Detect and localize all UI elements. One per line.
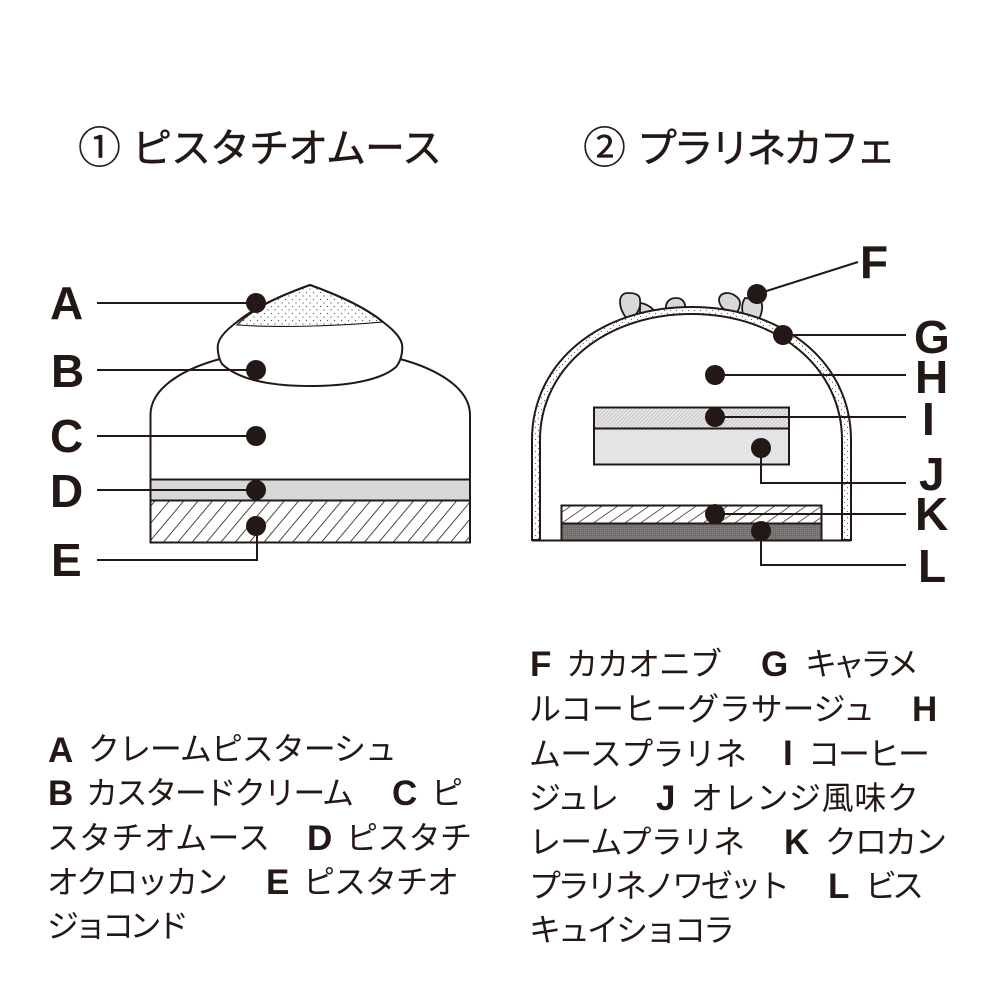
legend: praline cafe components: カカオニブ [566,646,722,682]
letter labels F to L: H [915,351,948,403]
letter labels F to L: L [918,540,946,592]
legend: pistachio mousse components: オクロッカン [47,864,228,900]
legend: pistachio mousse components: E [266,863,289,902]
letter labels A to E: A [50,277,83,329]
letter labels F to L: F [860,236,888,288]
letter labels A to E [50,277,84,586]
base line [532,540,851,542]
legend: praline cafe components: オレンジ風味ク [691,780,919,816]
cream blob B [218,285,402,386]
legend: praline cafe components: H [912,690,937,729]
heading: praline cafe: ② [583,125,626,173]
letter labels A to E: E [51,534,82,586]
leader lines A to E [97,303,257,560]
legend: praline cafe components: レームプラリネ [529,824,745,860]
legend: pistachio mousse components: A [48,731,73,770]
legend: pistachio mousse components: カスタードクリーム [86,775,354,811]
heading: pistachio mousse: ピスタチオムース [132,127,442,171]
legend: praline cafe components: K [784,823,809,862]
legend: pistachio mousse components: D [307,819,332,858]
legend: praline cafe components [529,645,947,948]
letter labels A to E: D [50,465,83,517]
letter labels A to E: B [51,345,84,397]
legend: praline cafe components: ジュレ [529,780,619,816]
legend: praline cafe components: ビス [865,868,924,904]
icon: cacao nibs [620,293,762,321]
legend: praline cafe components: クロカン [825,824,947,860]
legend: praline cafe components: F [530,645,551,684]
legend: pistachio mousse components: C [392,774,417,813]
letter labels F to L: I [922,393,935,445]
marker dots A to E [246,293,266,536]
legend: pistachio mousse components: ピスタチオ [303,864,459,900]
leader lines F to L [715,262,906,565]
insert I: coffee gelee [594,408,789,428]
legend: pistachio mousse components: ジョコンド [47,908,189,944]
legend: praline cafe components: プラリネノワゼット [529,868,790,904]
heading: praline cafe: プラリネカフェ [637,127,896,171]
coating G: dome shell [532,307,851,540]
layer E: pistachio joconde [150,500,470,542]
insert J: orange praline cream [594,428,789,464]
layer L: biscuit chocolat [562,524,822,540]
diagram: praline cafe cross-section [532,236,950,592]
legend: pistachio mousse components [47,731,472,944]
letter labels F to L: G [914,311,950,363]
legend: pistachio mousse components: スタチオムース [47,820,270,856]
legend: praline cafe components: ムースプラリネ [529,736,747,772]
legend: praline cafe components: コーヒー [808,736,930,772]
legend: praline cafe components: キャラメ [805,646,919,682]
letter labels F to L: K [915,488,948,540]
cream top A: dotted [237,285,383,326]
mousse dome body [150,359,470,542]
letter labels F to L: J [919,448,945,500]
legend: praline cafe components: L [828,867,849,906]
letter labels F to L [860,236,950,592]
legend: praline cafe components: ルコーヒーグラサージュ [529,691,875,727]
legend: pistachio mousse components: B [48,774,73,813]
layer K: croquant praline [562,506,822,524]
legend: praline cafe components: キュイショコラ [529,912,735,948]
diagram: pistachio mousse cross-section [50,277,470,586]
letter labels A to E: C [50,410,83,462]
legend: praline cafe components: J [656,779,675,818]
layer D: pistachio croquant [150,480,470,500]
legend: praline cafe components: G [761,645,788,684]
legend: pistachio mousse components: クレームピスターシュ [88,731,397,767]
marker dots F to L [705,284,793,541]
legend: pistachio mousse components: ピ [431,775,463,811]
legend: pistachio mousse components: ピスタチ [346,820,472,856]
heading: pistachio mousse: ① [78,125,121,173]
legend: praline cafe components: I [783,734,793,773]
